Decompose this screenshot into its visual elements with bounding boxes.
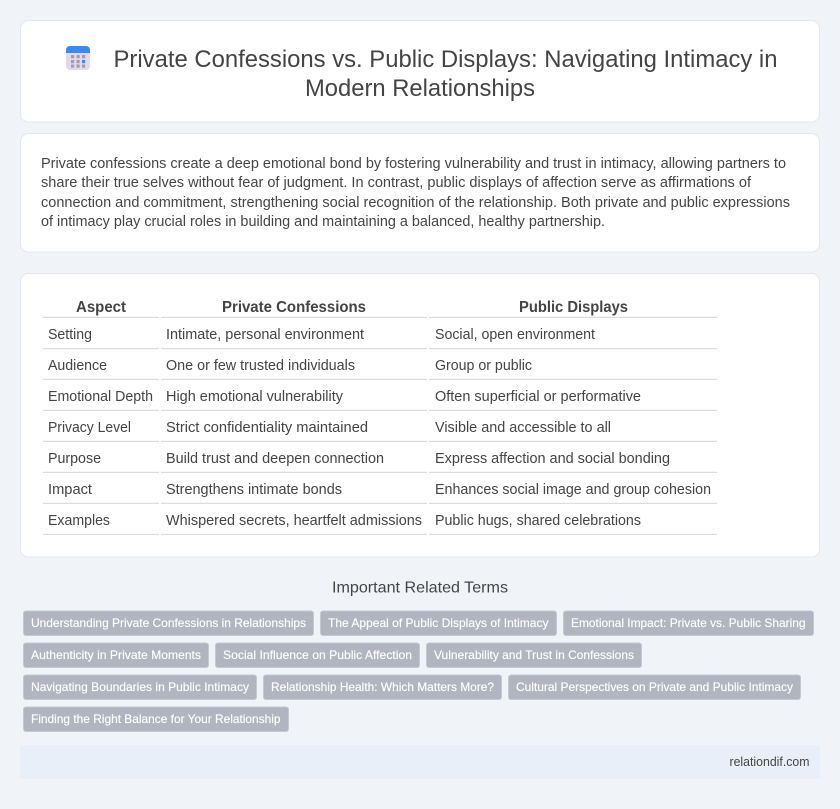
intro text: connection and commitment, strengthening social recognition of the relationship. Both private and public expressions [41,195,790,211]
row: audience: One or few trusted individuals [166,358,355,374]
row: impact [48,482,711,498]
row: privacy level [48,420,611,436]
intro text: share their true selves without fear of judgment. In contrast, public displays of affection serve as affirmations of [41,175,752,191]
tag: Relationship Health: Which Matters More? [271,680,494,694]
tag: Navigating Boundaries in Public Intimacy [31,680,249,694]
table header row: Private Confessions [222,299,366,316]
row: privacy level: Strict confidentiality maintained [166,420,368,436]
row: examples: Public hugs, shared celebrations [435,513,641,529]
tag: Understanding Private Confessions in Relationships [31,616,306,630]
row: audience: Group or public [435,358,532,374]
table header row [76,299,628,316]
tag [508,675,800,700]
row: setting: Intimate, personal environment [166,327,364,343]
panel: header [20,20,820,122]
row: impact: Strengthens intimate bonds [166,482,342,498]
tag: Authenticity in Private Moments [31,648,201,662]
tag [564,611,814,636]
row: impact: Impact [48,482,92,498]
tag [24,707,288,732]
row: emotional depth: Often superficial or performative [435,389,641,405]
row: setting: Social, open environment [435,327,595,343]
footer [20,745,820,779]
title: Private Confessions vs. Public Displays: Navigating Intimacy in [114,46,778,73]
row: audience [48,358,532,374]
row: examples: Whispered secrets, heartfelt admissions [166,513,422,529]
table header row: Public Displays [519,299,628,316]
footer: relationdif.com [730,755,810,769]
icon: calendar [66,46,90,70]
tag: Cultural Perspectives on Private and Public Intimacy [516,680,793,694]
tag: Social Influence on Public Affection [223,648,412,662]
row: emotional depth [48,389,641,405]
title: Modern Relationships [305,75,535,102]
tag [320,611,556,636]
row: purpose: Purpose [48,451,101,467]
row: impact: Enhances social image and group cohesion [435,482,711,498]
row: purpose [48,451,670,467]
row: emotional depth: High emotional vulnerability [166,389,344,405]
row: emotional depth: Emotional Depth [48,389,153,405]
row: purpose: Express affection and social bonding [435,451,670,467]
row: examples [48,513,641,529]
tag [264,675,502,700]
tag [426,643,642,668]
tag [24,611,314,636]
tag: The Appeal of Public Displays of Intimacy [328,616,548,630]
row: purpose: Build trust and deepen connection [166,451,384,467]
row: setting: Setting [48,327,92,343]
tag [24,643,208,668]
tag [216,643,420,668]
panel: comparison table [20,274,820,557]
tag: Emotional Impact: Private vs. Public Sharing [571,616,806,630]
related terms heading: Important Related Terms [332,580,508,596]
intro text [41,156,790,230]
tag [24,675,256,700]
table header row: Aspect [76,299,127,316]
row: examples: Examples [48,513,110,529]
row: audience: Audience [48,358,107,374]
panel: introduction [20,134,820,252]
tag: Vulnerability and Trust in Confessions [434,648,634,662]
intro text: Private confessions create a deep emotional bond by fostering vulnerability and trust in intimacy, allowing partners to [41,156,786,172]
row: privacy level: Visible and accessible to all [435,420,611,436]
tag: Finding the Right Balance for Your Relationship [31,712,281,726]
row: privacy level: Privacy Level [48,420,131,436]
row: setting [48,327,595,343]
intro text: of intimacy play crucial roles in building and maintaining a balanced, healthy partnership. [41,214,605,230]
panel: related term tags [24,611,814,732]
